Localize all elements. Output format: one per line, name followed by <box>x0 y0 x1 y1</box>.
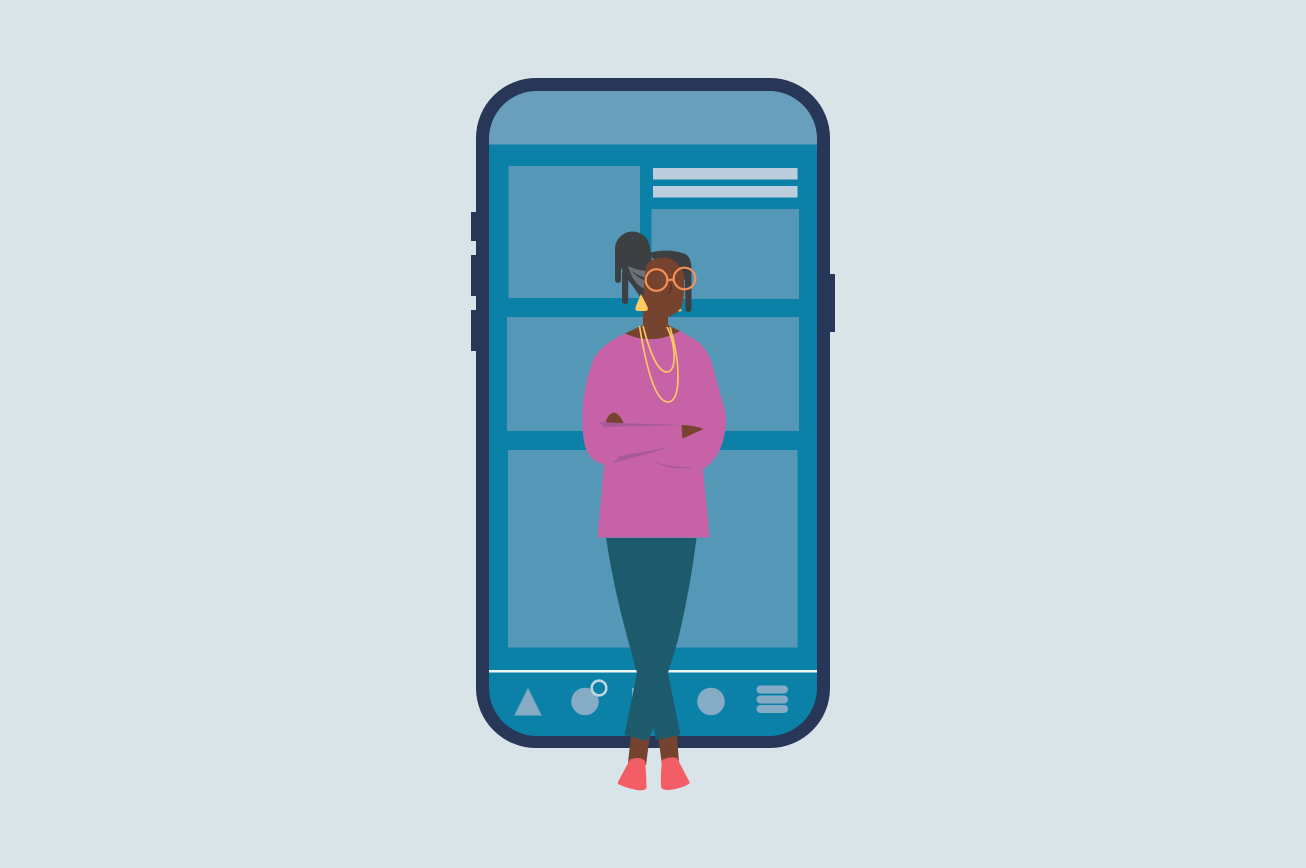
sleeve folds <box>599 422 695 469</box>
content card: top left <box>508 166 640 298</box>
nose line <box>668 284 671 294</box>
content card: middle <box>507 317 799 431</box>
icon: circle <box>697 688 725 715</box>
earring left <box>635 294 648 311</box>
text line 2 <box>653 186 798 198</box>
hair highlight <box>628 266 650 290</box>
necklaces <box>640 326 678 402</box>
phone screen <box>489 91 817 736</box>
hair back and bun <box>615 231 692 312</box>
phone <box>471 78 835 748</box>
icon: triangle <box>514 688 542 716</box>
text line 1 <box>653 168 798 180</box>
neck <box>643 305 668 332</box>
legs <box>628 735 679 765</box>
content card: top right <box>652 209 799 299</box>
phone side buttons <box>471 212 835 351</box>
navigation divider <box>489 670 817 672</box>
icon: menu <box>756 686 788 713</box>
trousers <box>606 538 696 741</box>
glasses <box>646 268 695 291</box>
shirt <box>582 331 726 538</box>
right hand <box>682 425 704 438</box>
content card: bottom <box>508 450 798 648</box>
shoes <box>618 757 690 790</box>
left hand <box>606 412 624 424</box>
phone body <box>476 78 830 748</box>
earring right <box>675 304 682 312</box>
icon: centre square, mostly hidden <box>632 688 642 700</box>
face <box>643 258 684 318</box>
screen header bar <box>489 91 817 144</box>
icon: circle with notification <box>571 681 606 715</box>
collar skin <box>625 325 680 339</box>
woman <box>582 231 726 790</box>
